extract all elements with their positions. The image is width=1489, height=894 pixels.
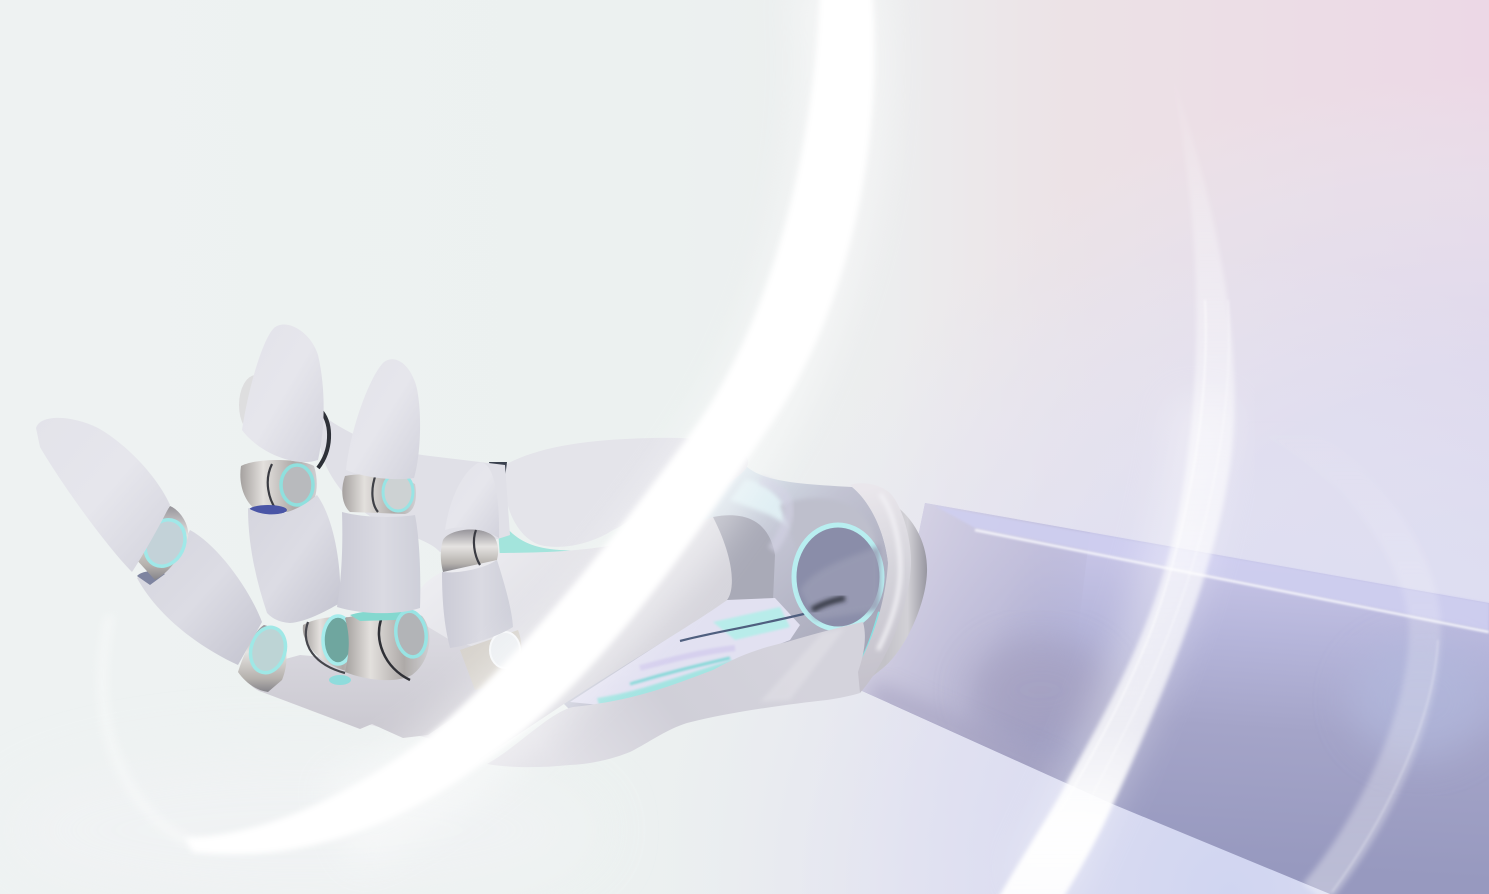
glass ring light xyxy=(794,525,882,629)
glass grey tube xyxy=(713,515,775,620)
index finger middle segment xyxy=(137,530,262,665)
little finger joint xyxy=(441,530,498,572)
ring fingertip xyxy=(346,359,420,479)
middle finger middle segment xyxy=(248,495,340,623)
knuckle roller B xyxy=(345,609,429,680)
palm lower body xyxy=(350,517,732,760)
index finger upper joint xyxy=(135,506,192,580)
ring halo xyxy=(1040,400,1205,890)
arc soft halo xyxy=(340,0,844,825)
forearm highlight line xyxy=(975,530,1489,632)
wrist silver neck xyxy=(868,505,927,680)
dark pivot arc xyxy=(318,412,329,468)
little finger middle segment xyxy=(442,560,513,648)
glass cyan wedge xyxy=(713,607,790,640)
right glowing ring xyxy=(997,50,1234,894)
index fingertip xyxy=(36,418,170,572)
ring finger middle segment xyxy=(337,512,420,613)
arc bright crescent xyxy=(185,0,874,854)
main glowing arc xyxy=(102,0,874,854)
arc tail returning left xyxy=(102,615,200,846)
wrist glass housing xyxy=(560,465,890,740)
glass cyan streak xyxy=(597,660,735,708)
middle finger joint xyxy=(240,460,317,515)
rear knob xyxy=(239,375,273,435)
ring body xyxy=(997,50,1234,894)
palm knuckle base xyxy=(238,625,520,738)
index finger dark cavity xyxy=(137,571,165,585)
little finger lower joint xyxy=(460,630,522,690)
wrist collar ring xyxy=(850,483,911,693)
cyan droplet xyxy=(329,675,351,685)
palm upper pad xyxy=(489,438,748,558)
forearm xyxy=(860,503,1489,894)
palm cyan strip xyxy=(497,515,600,558)
middle fingertip xyxy=(242,324,324,462)
ring fine lines xyxy=(1040,300,1206,845)
glass lower cavity xyxy=(570,598,800,705)
little fingertip xyxy=(445,462,499,538)
forearm reflection band xyxy=(935,506,1489,630)
palm dark slot xyxy=(489,462,507,492)
thumb-side finger proximal segment xyxy=(318,412,510,552)
wrist lower fairing xyxy=(487,622,865,767)
ring finger joint xyxy=(342,473,416,514)
index finger lower joint xyxy=(238,623,290,692)
knuckle roller A xyxy=(303,616,360,685)
outer faint ring xyxy=(1250,418,1438,894)
